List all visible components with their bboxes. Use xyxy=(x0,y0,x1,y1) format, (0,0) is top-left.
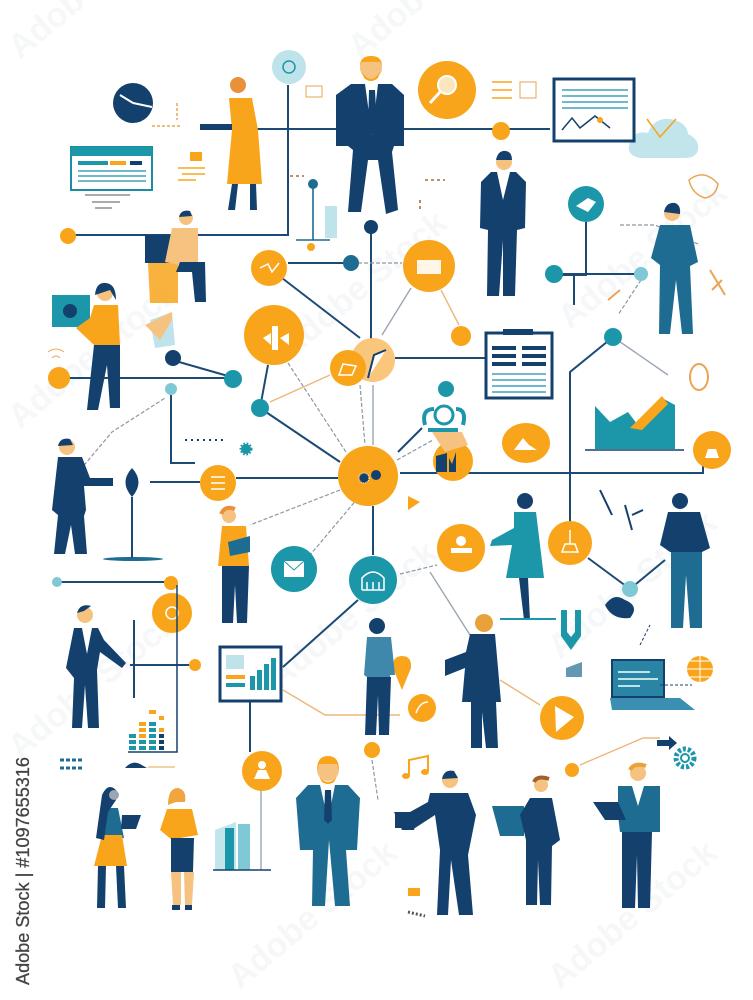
network connector lines xyxy=(50,85,703,870)
person: man navy coat with tablet xyxy=(445,614,501,748)
person: man orange shirt with folder xyxy=(218,508,250,623)
person: man presenting tablet xyxy=(394,771,476,915)
faint stock watermark: Adobe Stock xyxy=(541,833,724,996)
faint stock watermark: Adobe Stock xyxy=(1,603,184,766)
person: seated man at desk xyxy=(145,211,206,303)
person: man navy sweater back view xyxy=(660,493,710,628)
icon: map pin xyxy=(393,656,411,690)
faint stock watermark: Adobe Stock xyxy=(221,833,404,996)
panel: dashboard card left xyxy=(71,147,152,190)
chart: light teal column chart xyxy=(213,822,271,870)
person: standing man navy suit xyxy=(480,151,526,296)
panel: chart screen top right xyxy=(554,79,634,141)
faint stock watermark: Adobe Stock xyxy=(271,203,454,366)
icon: music notes xyxy=(402,756,429,779)
icon: cloud xyxy=(629,119,698,158)
person: man with large tablet xyxy=(492,778,560,905)
network node circles xyxy=(48,50,731,791)
person: large bearded man bottom xyxy=(296,756,360,906)
person: bearded man top center xyxy=(336,56,404,214)
person: woman in orange dress xyxy=(200,77,262,210)
chart: teal mountain area chart xyxy=(585,396,684,450)
person: man blue shirt back view xyxy=(364,618,395,735)
icon: hanging gadget tool xyxy=(103,468,163,561)
person: woman with tablet and orange skirt xyxy=(94,787,141,908)
icon: person badge above central node xyxy=(424,406,468,452)
icon: parachute outline xyxy=(689,175,718,198)
person: woman orange top with board xyxy=(76,283,120,410)
icon: small decorative glyphs xyxy=(48,82,725,916)
icon: laptop xyxy=(610,660,695,710)
faint stock watermark: Adobe Stock xyxy=(1,273,184,436)
person: man teal jacket with tablet xyxy=(593,765,660,908)
panel: monitor with bar chart xyxy=(220,647,281,701)
faint stock watermark: Adobe Stock xyxy=(541,503,724,666)
panel: clipboard checklist xyxy=(486,329,552,398)
person: man navy suit presenting xyxy=(66,605,126,728)
faint stock watermark: Adobe Stock xyxy=(261,533,444,696)
stock credit text: Adobe Stock | #1097655316 xyxy=(13,757,33,985)
faint stock watermark: Adobe Stock xyxy=(551,173,734,336)
chart: bars in frame xyxy=(128,585,177,752)
person: woman orange top navy skirt xyxy=(160,788,198,910)
person: woman teal dress xyxy=(490,493,556,620)
icon: shield arrow xyxy=(561,610,581,650)
icon: balloon outline xyxy=(690,364,708,390)
person: man navy suit pointing xyxy=(52,439,113,554)
icon: arrow and gear xyxy=(657,736,694,767)
person: man teal jacket right xyxy=(651,203,698,334)
